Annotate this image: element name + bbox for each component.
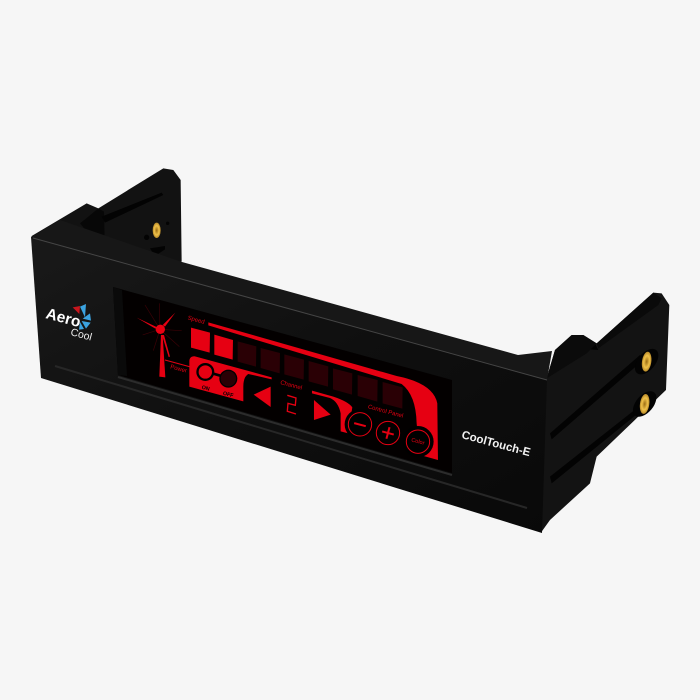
power panel with ON and OFF buttons: ON xyxy=(201,385,210,393)
right rear bracket xyxy=(523,293,669,532)
display graphics xyxy=(137,303,438,460)
left rear bracket xyxy=(32,168,182,270)
label: Power: Power xyxy=(169,364,187,375)
product name: CoolTouch-E: CoolTouch-E xyxy=(460,429,532,459)
speed level blocks xyxy=(191,328,403,409)
channel digit xyxy=(287,395,296,414)
speed bar outline xyxy=(208,322,438,460)
power panel with ON and OFF buttons: OFF xyxy=(222,391,235,400)
power panel with ON and OFF buttons xyxy=(189,356,272,401)
button: minus xyxy=(345,409,375,440)
button: Color: Color xyxy=(410,437,425,447)
display screen xyxy=(113,287,452,473)
icon: logo fan xyxy=(73,304,91,330)
label: Speed: Speed xyxy=(187,315,205,326)
icon: brass screw insert, lower right xyxy=(628,387,661,421)
arrow: channel left xyxy=(254,387,271,407)
button: Color xyxy=(402,426,434,457)
frame highlight line xyxy=(33,238,547,380)
arrow: channel right xyxy=(314,400,331,420)
button: plus xyxy=(376,421,400,445)
front face panel xyxy=(31,237,547,533)
label: Power xyxy=(165,360,197,375)
top rim of frame xyxy=(31,220,552,380)
logo: AeroCool: Cool xyxy=(69,326,93,343)
control panel shape xyxy=(312,391,352,433)
logo: AeroCool: Aero xyxy=(44,305,82,331)
icon: wind turbine xyxy=(137,303,182,377)
icon: brass screw insert, left xyxy=(153,223,161,238)
icon: brass screw insert, upper right xyxy=(630,345,663,379)
logo: AeroCool xyxy=(44,304,93,343)
label: Channel: Channel xyxy=(279,380,303,392)
label: Control Panel: Control Panel xyxy=(367,404,404,420)
